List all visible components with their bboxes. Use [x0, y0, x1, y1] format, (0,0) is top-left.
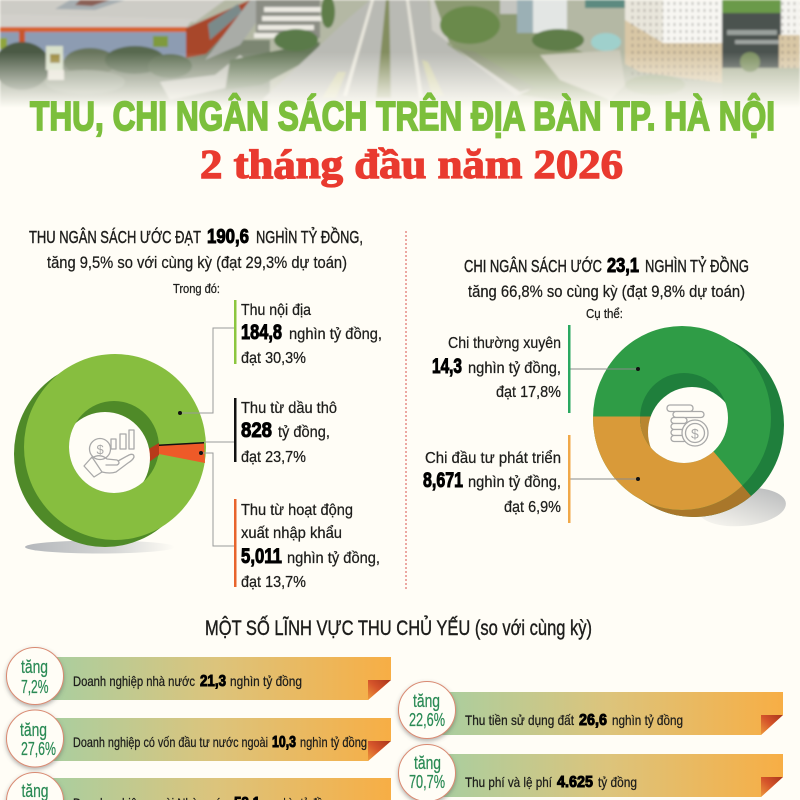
- revenue heading: [29, 226, 363, 296]
- callout: import export revenue: [234, 499, 380, 591]
- banner: land use fees: 26,6: [579, 712, 607, 729]
- callout: import export revenue: 5,011: [241, 545, 282, 568]
- banner: non-state enterprises: [6, 772, 391, 800]
- spending donut chart: [593, 326, 787, 530]
- banner: foreign invested enterprises: 10,3: [272, 734, 296, 751]
- callout: crude oil revenue: Thu từ dầu thô: [241, 400, 337, 417]
- section heading: main revenue fields: MỘT SỐ LĨNH VỰC THU CHỦ YẾU (so với cùng kỳ): [205, 616, 592, 640]
- leader line: recurrent spending: [570, 367, 640, 371]
- leader line: crude oil revenue: [204, 441, 234, 443]
- callout: import export revenue: Thu từ hoạt động: [241, 502, 353, 519]
- banner: state-owned enterprises: 21,3: [200, 673, 226, 690]
- panel: budget spending: [423, 255, 787, 530]
- callout: development investment: nghìn tỷ đồng,: [468, 474, 561, 491]
- revenue heading: 190,6: [207, 226, 249, 248]
- callout: crude oil revenue: tỷ đồng,: [278, 424, 330, 441]
- banner: fees and charges: Thu phí và lệ phí: [465, 774, 552, 790]
- banner: fees and charges: 70,7%: [409, 772, 445, 792]
- panel: budget revenue: [14, 226, 382, 591]
- banner: foreign invested enterprises: tăng: [20, 720, 47, 740]
- revenue heading: NGHÌN TỶ ĐỒNG,: [256, 226, 363, 247]
- banner: foreign invested enterprises: 27,6%: [21, 739, 56, 759]
- callout: crude oil revenue: đạt 23,7%: [241, 449, 306, 466]
- icon: hand holding coin with rising bars: $: [96, 442, 104, 457]
- banner: land use fees: tăng: [413, 691, 440, 711]
- callout: domestic revenue: 184,8: [241, 321, 282, 344]
- callout: recurrent spending: Chi thường xuyên: [448, 335, 561, 352]
- icon: coin stack: [667, 405, 708, 446]
- spending heading: NGHÌN TỶ ĐỒNG: [645, 255, 749, 276]
- banner: state-owned enterprises: [6, 648, 391, 704]
- callout: development investment: đạt 6,9%: [504, 499, 561, 516]
- banner: state-owned enterprises: tăng: [21, 657, 48, 677]
- callout: crude oil revenue: 828: [241, 419, 272, 442]
- revenue heading: THU NGÂN SÁCH ƯỚC ĐẠT: [29, 226, 201, 247]
- callout: import export revenue: nghìn tỷ đồng,: [287, 550, 380, 567]
- callout: development investment: 8,671: [423, 469, 463, 492]
- banner: land use fees: [398, 682, 783, 738]
- banner: state-owned enterprises: nghìn tỷ đồng: [230, 673, 302, 689]
- banner: foreign invested enterprises: [6, 710, 391, 767]
- callout: domestic revenue: nghìn tỷ đồng,: [289, 326, 382, 343]
- callout: recurrent spending: [432, 325, 570, 413]
- spending heading: Cụ thể:: [586, 307, 623, 321]
- banner: fees and charges: [398, 744, 783, 800]
- spending heading: [464, 255, 749, 321]
- revenue donut chart: [14, 354, 206, 554]
- callout: domestic revenue: [234, 300, 382, 367]
- leader line: domestic revenue: [178, 328, 234, 415]
- callout: import export revenue: đạt 13,7%: [241, 574, 306, 591]
- banner: land use fees: nghìn tỷ đồng: [612, 712, 683, 728]
- banner: fees and charges: 4.625: [557, 774, 593, 791]
- callout: recurrent spending: nghìn tỷ đồng,: [468, 360, 561, 377]
- banner: fees and charges: tăng: [414, 753, 441, 773]
- icon: coin stack: $: [691, 426, 699, 442]
- callout: development investment: Chi đầu tư phát triển: [425, 449, 561, 467]
- spending heading: tăng 66,8% so cùng kỳ (đạt 9,8% dự toán): [468, 283, 745, 301]
- leader line: development investment: [570, 477, 640, 481]
- banner: state-owned enterprises: 7,2%: [21, 677, 48, 697]
- banner: land use fees: Thu tiền sử dụng đất: [465, 712, 574, 728]
- leader line: import export revenue: [199, 451, 234, 546]
- banner: foreign invested enterprises: nghìn tỷ đồng: [300, 734, 367, 750]
- callout: domestic revenue: Thu nội địa: [241, 302, 311, 319]
- banner: land use fees: 22,6%: [409, 710, 445, 730]
- banner: state-owned enterprises: Doanh nghiệp nhà nước: [73, 673, 195, 689]
- callout: import export revenue: xuất nhập khẩu: [241, 524, 342, 542]
- callout: domestic revenue: đạt 30,3%: [241, 350, 306, 367]
- callout: crude oil revenue: [234, 398, 337, 466]
- banner: fees and charges: tỷ đồng: [598, 774, 637, 790]
- icon: hand holding coin with rising bars: [84, 430, 134, 477]
- header photo: Hanoi road and buildings: [0, 0, 800, 122]
- callout: development investment: [423, 435, 570, 523]
- spending heading: CHI NGÂN SÁCH ƯỚC: [464, 255, 602, 276]
- banner: foreign invested enterprises: Doanh nghiệp có vốn đầu tư nước ngoài: [73, 734, 268, 750]
- callout: recurrent spending: đạt 17,8%: [496, 384, 561, 401]
- callout: recurrent spending: 14,3: [432, 355, 462, 378]
- revenue heading: tăng 9,5% so với cùng kỳ (đạt 29,3% dự toán): [47, 254, 347, 272]
- revenue heading: Trong đó:: [173, 282, 220, 296]
- subtitle: 2 tháng đầu năm 2026: [200, 141, 623, 187]
- spending heading: 23,1: [607, 255, 639, 277]
